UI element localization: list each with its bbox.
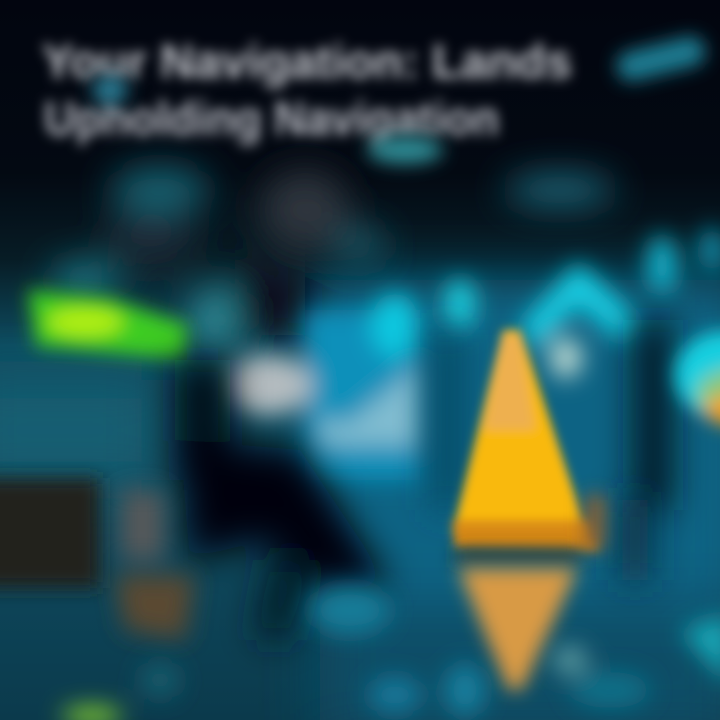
top right teal streak: [614, 33, 708, 84]
dark brown box lower left: [0, 478, 100, 588]
bottom reflections: [62, 586, 720, 720]
title text: Upholding Navigation: [44, 93, 499, 146]
right rainbow semicircle: [675, 331, 720, 426]
dark silhouette figures: [175, 320, 671, 640]
green highlight bar: [28, 290, 188, 360]
title text: [42, 36, 572, 146]
yellow cone: [452, 330, 598, 550]
upper mid shapes: [51, 166, 615, 354]
gray and brown shapes lower left: [115, 490, 195, 640]
background colour washes: [0, 280, 720, 720]
blue central cluster: [224, 228, 720, 480]
teal highlights near title: [92, 76, 443, 164]
cone shadow: [455, 495, 605, 562]
cone reflection: [458, 568, 578, 690]
title text: Your Navigation: Lands: [42, 36, 572, 89]
